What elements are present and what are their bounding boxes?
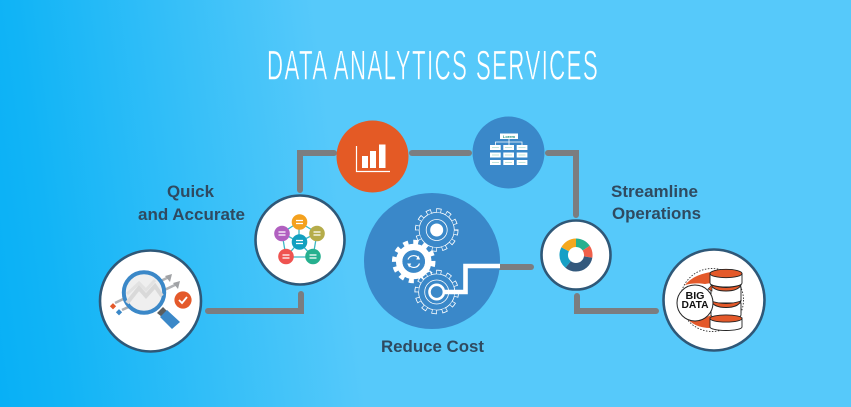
icon: bottom outline gear	[417, 272, 457, 312]
connector lines	[208, 153, 656, 311]
icon: big data circle: BIG	[686, 291, 705, 302]
database stack	[710, 269, 742, 330]
icon: donut circle	[542, 220, 610, 290]
icon: top outline gear	[417, 210, 456, 250]
icon: network circle	[256, 196, 344, 284]
label: Streamline Operations: Streamline	[611, 182, 698, 201]
label: Reduce Cost: Reduce Cost	[381, 337, 484, 356]
icon: big data circle	[664, 250, 764, 350]
label: Quick and Accurate: Quick	[167, 182, 215, 201]
icon: blue org chart circle: Lorem	[503, 134, 516, 139]
label: Streamline Operations: Operations	[612, 204, 701, 223]
icon: gears circle	[364, 193, 500, 329]
icon: orange bar chart circle	[336, 120, 408, 192]
title: DATA ANALYTICS SERVICES	[267, 43, 598, 89]
label: Streamline Operations	[611, 182, 701, 223]
icon: blue org chart circle	[472, 116, 544, 188]
label: Quick and Accurate	[138, 182, 245, 224]
icon: big data circle: DATA	[682, 300, 708, 311]
label: Quick and Accurate: and Accurate	[138, 205, 245, 224]
icon: magnifier circle	[100, 250, 201, 352]
icon: centre solid gear	[394, 242, 433, 281]
white connector inside gears circle	[445, 266, 500, 292]
